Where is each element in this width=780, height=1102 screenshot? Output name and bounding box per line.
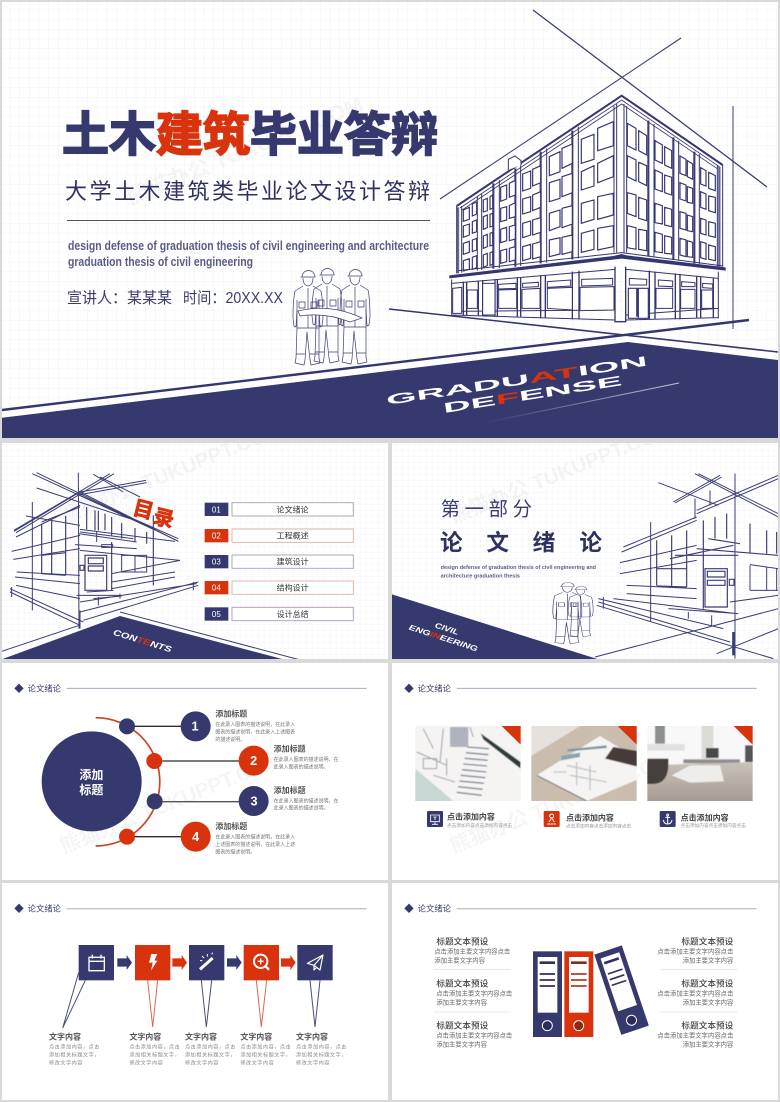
step text 5: 添加相关标题文字， [296, 1051, 347, 1059]
arc [96, 718, 160, 846]
left text block 1 [434, 936, 510, 965]
step text 4: 文字内容 [240, 1031, 272, 1041]
card caption 3: 点击添加内容点击添加内容点击 [681, 822, 746, 829]
list item 01: 01 [212, 505, 221, 514]
presenter and date [68, 290, 283, 305]
list item 05 [205, 607, 353, 621]
text block 2 [274, 743, 338, 770]
step text 4 [240, 1031, 291, 1066]
card caption 1: 点击添加内容 [447, 811, 495, 821]
heading: mulu [134, 498, 174, 528]
binder 2 [564, 951, 593, 1037]
central circle: 添加 [79, 767, 103, 782]
heading: mulu: 录 [151, 505, 176, 533]
text block 1: 在此录入图表的描述说明，在此录入 [215, 721, 295, 728]
step text 2 [129, 1031, 180, 1066]
step text 2: 文字内容 [129, 1031, 161, 1041]
navy ground block [0, 342, 778, 440]
illustration: two workers [553, 582, 593, 644]
text block 2: 此录入图表的描述说明。 [274, 763, 328, 770]
panel: four-point diagram slide [2, 663, 388, 880]
list item 04 [205, 581, 353, 594]
left text block 2: 添加主要文字内容 [436, 998, 488, 1007]
right text block 1: 点击添加主要文字内容点击 [657, 946, 733, 955]
heading: section title: 论 [440, 529, 463, 555]
list item 02: 02 [212, 532, 221, 541]
text block 4 [215, 821, 295, 856]
english description: design defense of graduation thesis of civil engineering and architecture [68, 239, 429, 253]
presenter and date: 宣讲人：某某某 [67, 289, 172, 307]
numbered circles: 1 [191, 720, 199, 734]
header: 论文绪论 [418, 904, 452, 914]
list item 03 [205, 555, 353, 568]
header: 论文绪论 [28, 904, 62, 914]
step square 5: paper plane [297, 945, 333, 980]
header [14, 904, 367, 914]
step text 3: 点击添加内容，点击 [185, 1043, 236, 1051]
numbered circles: 3 [250, 794, 258, 808]
list item 01: 论文绪论 [277, 504, 309, 514]
heading: part one: 第一部分 [441, 499, 537, 521]
central circle: 标题 [79, 782, 103, 797]
text block 1 [215, 708, 295, 743]
step text 1: 添加相关标题文字， [49, 1051, 100, 1059]
panel: cover slide [0, 2, 778, 440]
text block 4: 上述图表的描述说明，在此录入上述 [215, 841, 295, 848]
photo 2: notebook on desk [531, 726, 637, 801]
left text block 1: 标题文本预设 [436, 936, 489, 947]
list item 03: 建筑设计 [277, 557, 309, 567]
arrow [117, 955, 132, 970]
divider lines [433, 969, 737, 1012]
right text block 3: 标题文本预设 [681, 1020, 734, 1031]
left text block 1: 添加主要文字内容 [434, 956, 486, 965]
navy ground block [2, 616, 283, 659]
step text 1: 点击添加内容，点击 [49, 1043, 100, 1051]
text block 3: 添加标题 [274, 785, 306, 795]
photo 1: blueprint and pen [415, 726, 521, 801]
numbered circles: 2 [250, 754, 257, 768]
step square 4: magnifier [244, 945, 279, 980]
contents lettering: CONTENTS [112, 627, 174, 654]
civil engineering lettering: CIVIL [434, 621, 460, 637]
text block 3: 在此录入图表的描述说明，在 [274, 797, 338, 804]
watermark: 熊猫办公 TUKUPPT.COM [56, 417, 285, 528]
left text block 2: 标题文本预设 [436, 978, 489, 989]
step text 3 [185, 1031, 236, 1066]
step text 3: 添加相关标题文字， [185, 1051, 236, 1059]
step square 3: wand [189, 945, 224, 980]
english description: design defense of graduation thesis of civil engineering and [441, 565, 597, 571]
list item 01 [205, 503, 353, 516]
list item 02: 工程概述 [277, 531, 309, 541]
step text 2: 点击添加内容，点击 [129, 1043, 180, 1051]
step text 2: 添加相关标题文字， [129, 1051, 180, 1059]
header [404, 684, 757, 694]
english description [441, 565, 597, 580]
connector lines [135, 726, 240, 837]
photo 3: office desk and keyboard [647, 726, 753, 801]
list item 04: 04 [212, 584, 221, 593]
card caption 2: 点击添加内容 [566, 812, 614, 822]
right text block 3: 点击添加主要文字内容点击 [657, 1030, 733, 1039]
step text 4: 修改文字内容 [240, 1058, 274, 1066]
binder 1 [533, 951, 562, 1037]
card caption 2 [544, 811, 632, 830]
step text 5 [296, 1031, 347, 1066]
list item 05: 设计总结 [277, 609, 309, 619]
step text 4: 添加相关标题文字， [240, 1051, 291, 1059]
header: 论文绪论 [28, 684, 62, 694]
illustration: building with perspective lines [2, 10, 778, 410]
panel: contents slide [2, 443, 388, 659]
list item 04: 结构设计 [277, 583, 309, 593]
step text 3: 文字内容 [185, 1031, 217, 1041]
graduation defense lettering: DE F ENSE [442, 372, 623, 416]
civil engineering lettering: ENGINEERING [408, 623, 479, 653]
list item 05: 05 [212, 610, 221, 619]
text block 1: 添加标题 [215, 708, 247, 718]
corner ribbons [502, 726, 753, 745]
heading: section title: 论 [579, 529, 602, 555]
step text 5: 点击添加内容，点击 [296, 1043, 347, 1051]
step text 3: 修改文字内容 [185, 1058, 219, 1066]
left text block 3: 点击添加主要文字内容点击 [436, 1030, 512, 1039]
watermark: 熊猫办公 TUKUPPT.COM [446, 417, 675, 528]
card caption 1 [427, 811, 513, 829]
panel: process flow slide [2, 883, 388, 1100]
watermark: 熊猫办公 TUKUPPT.COM [56, 747, 285, 858]
right text block 3 [657, 1020, 734, 1049]
left text block 1: 点击添加主要文字内容点击 [434, 946, 510, 955]
arrow [172, 955, 187, 970]
right text block 2: 点击添加主要文字内容点击 [657, 988, 733, 997]
pointer lines [63, 973, 320, 1028]
right text block 1 [657, 936, 734, 965]
list item 02 [205, 529, 353, 542]
right text block 2: 添加主要文字内容 [683, 998, 734, 1007]
right text block 3: 添加主要文字内容 [683, 1040, 734, 1049]
presenter and date: 时间：20XX.XX [183, 289, 284, 307]
navy corner block [392, 594, 598, 659]
step text 4: 点击添加内容，点击 [240, 1043, 291, 1051]
header [404, 904, 757, 914]
text block 3 [274, 785, 338, 812]
left text block 2: 点击添加主要文字内容点击 [436, 988, 512, 997]
right text block 2 [657, 978, 734, 1007]
english description: graduation thesis of civil engineering [68, 255, 253, 269]
english description: architecture graduation thesis [441, 574, 520, 580]
step text 1: 文字内容 [49, 1031, 81, 1041]
illustration: three workers [293, 268, 370, 365]
heading: section title [440, 530, 602, 552]
arrow [281, 955, 296, 970]
numbered circles: 4 [192, 830, 199, 844]
text block 1: 的描述说明。 [215, 736, 245, 743]
header: 论文绪论 [418, 684, 452, 694]
right text block 1: 添加主要文字内容 [683, 956, 734, 965]
text block 1: 图表的描述说明，在此录入上述图表 [215, 728, 295, 735]
title: 土木建筑毕业答辩 [62, 108, 438, 161]
right text block 2: 标题文本预设 [681, 978, 734, 989]
graduation defense lettering [385, 353, 679, 423]
binder 3 tilted [594, 945, 649, 1035]
heading: mulu: 目 [130, 497, 156, 524]
left text block 3: 标题文本预设 [436, 1020, 489, 1031]
panel: photo cards slide [392, 663, 778, 880]
heading: section title: 绪 [533, 529, 555, 555]
central circle [42, 731, 142, 831]
illustration: building sketch [2, 473, 302, 660]
header [14, 684, 367, 694]
panel: section one slide [392, 443, 778, 659]
step text 1 [49, 1031, 100, 1066]
card caption 3 [660, 811, 746, 829]
text block 4: 添加标题 [215, 821, 247, 831]
arrow [227, 955, 242, 970]
text block 4: 图表的描述说明。 [215, 849, 255, 856]
illustration: building sketch [595, 474, 778, 659]
left text block 3: 添加主要文字内容 [436, 1040, 488, 1049]
text block 4: 在此录入图表的描述说明，在此录入 [215, 834, 295, 841]
arc nodes [119, 718, 163, 845]
contents list [205, 503, 353, 621]
card caption 2: 点击添加内容点击添加内容点击 [566, 823, 632, 830]
text block 3: 此录入图表的描述说明。 [274, 805, 328, 812]
step text 5: 文字内容 [296, 1031, 328, 1041]
watermark: 熊猫办公 TUKUPPT.COM [123, 92, 366, 210]
right text block 1: 标题文本预设 [681, 936, 734, 947]
title divider [67, 220, 430, 221]
step text 2: 修改文字内容 [129, 1058, 163, 1066]
left text block 3 [436, 1020, 512, 1049]
step text 5: 修改文字内容 [296, 1058, 330, 1066]
panel: binders slide [392, 883, 778, 1100]
subtitle: 大学土木建筑类毕业论文设计答辩 [65, 179, 433, 204]
step square 1: calendar [79, 945, 114, 980]
text block 2: 在此录入图表的描述说明，在 [274, 756, 338, 763]
step square 2: lightning [135, 945, 170, 980]
heading: section title: 文 [486, 529, 509, 555]
list item 03: 03 [212, 558, 221, 567]
english description [68, 239, 429, 269]
graduation defense lettering: GRADU AT ION [385, 353, 648, 408]
step text 1: 修改文字内容 [49, 1058, 83, 1066]
watermark: 熊猫办公 TUKUPPT.COM [446, 747, 675, 858]
numbered circles [181, 711, 269, 852]
left text block 2 [436, 978, 512, 1007]
card caption 3: 点击添加内容 [681, 812, 729, 822]
card caption 1: 点击添加内容点击添加内容点击 [447, 822, 513, 829]
text block 2: 添加标题 [274, 743, 306, 753]
